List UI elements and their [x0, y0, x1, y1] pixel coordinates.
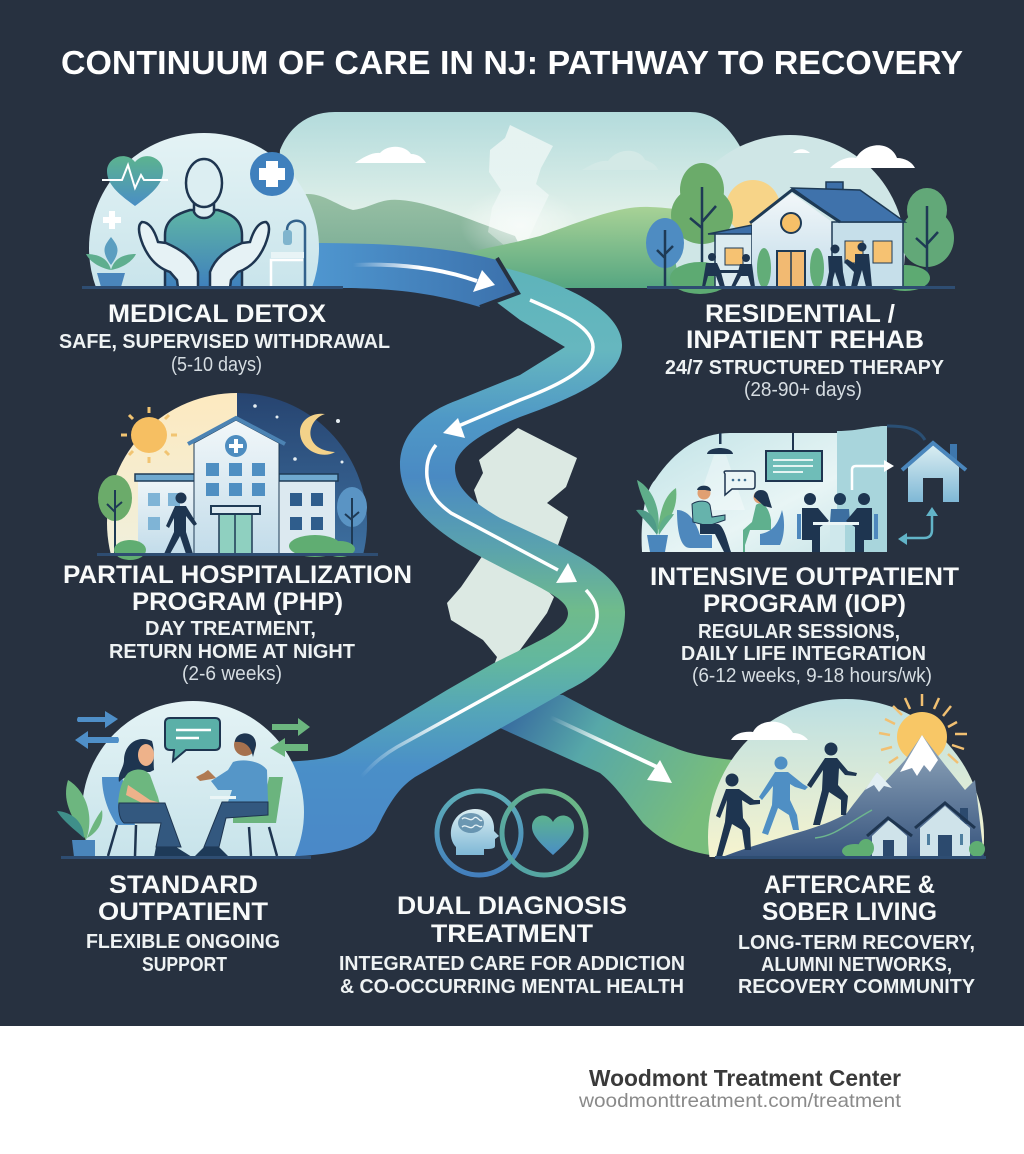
arrow: residential to PHP: [443, 300, 593, 438]
crescent moon: [300, 414, 335, 455]
ground line aftercare: [715, 856, 986, 859]
line: IOP to standard outpatient: [361, 590, 597, 777]
winding pathway road: [260, 268, 625, 857]
text: partial hospitalization: (2-6 weeks): [182, 663, 282, 685]
icon: heart with pulse: [102, 156, 168, 206]
text: residential: 24/7 STRUCTURED THERAPY: [665, 357, 945, 379]
tree right: [337, 487, 367, 554]
ceiling lamp: [695, 433, 745, 510]
text: standard outpatient: OUTPATIENT: [98, 898, 268, 926]
tree blue: [646, 218, 684, 287]
text: standard outpatient: SUPPORT: [142, 954, 227, 976]
text: aftercare: RECOVERY COMMUNITY: [738, 976, 976, 998]
people: [702, 242, 872, 287]
cloud left: [355, 147, 426, 163]
text: intensive outpatient: INTENSIVE OUTPATIENT: [650, 563, 959, 591]
text: medical detox: MEDICAL DETOX: [108, 300, 326, 328]
illustration: residential rehab house: [646, 135, 954, 294]
text: partial hospitalization: [63, 561, 412, 685]
icon: IV stand and bed: [271, 221, 305, 288]
head with brain: [451, 809, 499, 855]
tree left: [98, 475, 132, 554]
white footer band: [0, 1026, 1024, 1154]
illustration: partial hospitalization: [98, 390, 372, 560]
text: dual diagnosis: TREATMENT: [431, 920, 593, 948]
text: partial hospitalization: PARTIAL HOSPITALIZATION: [63, 561, 412, 589]
woman in chair: [102, 739, 192, 857]
sun: [726, 180, 780, 234]
ground line medical: [82, 286, 343, 289]
text: dual diagnosis: [339, 892, 685, 998]
houses: [867, 803, 975, 857]
text: medical detox: (5-10 days): [171, 354, 262, 376]
icon: person: [165, 159, 242, 288]
title: CONTINUUM OF CARE IN NJ: PATHWAY TO RECOVERY: [61, 44, 963, 81]
therapy pair: [677, 486, 784, 552]
bushes: [842, 839, 985, 858]
footer attribution: Woodmont Treatment Center: [589, 1065, 901, 1091]
arrows: green exchange: [270, 718, 310, 757]
aftercare branch road: [500, 690, 770, 857]
cloud: [731, 722, 808, 740]
speech bubble: [165, 718, 220, 761]
tree big left: [671, 163, 733, 287]
icon: medical cross: [250, 152, 294, 196]
illustration: standard outpatient: [83, 701, 304, 856]
sun with rays: [879, 694, 967, 763]
sun: [121, 407, 177, 463]
wall screen: [766, 433, 822, 481]
text: dual diagnosis: INTEGRATED CARE FOR ADDICTION: [339, 953, 685, 975]
text: dual diagnosis: & CO-OCCURRING MENTAL HEALTH: [340, 976, 684, 998]
icon: home: [902, 443, 966, 502]
walking person: [164, 492, 197, 554]
icon: potted plant: [86, 237, 136, 287]
group at table: [797, 493, 878, 552]
bushes: [114, 535, 355, 560]
text: medical detox: SAFE, SUPERVISED WITHDRAWAL: [59, 331, 390, 353]
illustration: aftercare: [708, 694, 985, 857]
text: residential: RESIDENTIAL /: [705, 300, 895, 328]
man in chair: [194, 733, 283, 857]
text: aftercare: SOBER LIVING: [762, 898, 937, 926]
text: intensive outpatient: DAILY LIFE INTEGRATION: [681, 643, 926, 665]
icon: caring hands: [139, 222, 269, 288]
footer attribution: [578, 1065, 902, 1112]
text: intensive outpatient: PROGRAM (IOP): [703, 590, 906, 618]
text: partial hospitalization: DAY TREATMENT,: [145, 618, 316, 640]
text: dual diagnosis: DUAL DIAGNOSIS: [397, 892, 627, 920]
text: intensive outpatient: [650, 563, 959, 687]
text: aftercare: LONG-TERM RECOVERY,: [738, 932, 975, 954]
stars: [253, 404, 344, 464]
central NJ map silhouette: [447, 428, 577, 670]
text: standard outpatient: FLEXIBLE ONGOING: [86, 931, 280, 953]
footer attribution: woodmonttreatment.com/treatment: [578, 1090, 902, 1112]
text: intensive outpatient: (6-12 weeks, 9-18 hours/wk): [692, 665, 932, 687]
arrow: detox to residential: [353, 265, 495, 292]
text: standard outpatient: [86, 871, 280, 976]
text: residential: [665, 300, 945, 401]
bushes: [670, 262, 930, 294]
pale NJ silhouette: [488, 125, 553, 246]
three people climbing: [716, 742, 857, 857]
illustration: medical detox: [86, 133, 319, 290]
arrows: loop to daily life: [898, 507, 938, 545]
cypress trees: [757, 248, 824, 288]
plant: [636, 480, 676, 552]
text: aftercare: [738, 871, 976, 998]
illustration: intensive outpatient: [636, 426, 925, 552]
first road segment with arrowhead edge: [300, 243, 518, 307]
icon: dual diagnosis rings: [437, 791, 586, 875]
potted plant: [57, 780, 102, 857]
text: partial hospitalization: RETURN HOME AT NIGHT: [109, 641, 355, 663]
arrow: PHP to IOP: [427, 445, 577, 583]
house: [708, 182, 905, 287]
ground line residential: [647, 286, 955, 289]
speech bubble: [724, 471, 755, 495]
heart: [532, 816, 574, 855]
cloud right: [582, 151, 658, 170]
text: aftercare: AFTERCARE &: [764, 871, 935, 899]
text: intensive outpatient: REGULAR SESSIONS,: [698, 621, 900, 643]
white arrow up and out: [852, 460, 894, 490]
text: residential: INPATIENT REHAB: [686, 326, 924, 354]
hospital building: [135, 418, 338, 554]
landscape panel with hills and pale NJ outline: [270, 112, 742, 288]
text: partial hospitalization: PROGRAM (PHP): [132, 588, 343, 616]
text: residential: (28-90+ days): [744, 379, 862, 401]
small sparkle plus: [103, 211, 121, 229]
text: medical detox: [59, 300, 390, 376]
ground line PHP: [97, 553, 378, 556]
tree right: [900, 188, 954, 287]
arrows: blue exchange: [75, 711, 119, 749]
cloud: [830, 145, 915, 168]
ground line standard: [61, 856, 311, 859]
text: standard outpatient: STANDARD: [109, 871, 258, 899]
arrow: to aftercare: [550, 717, 672, 783]
mountains: [722, 735, 984, 857]
text: aftercare: ALUMNI NETWORKS,: [761, 954, 952, 976]
